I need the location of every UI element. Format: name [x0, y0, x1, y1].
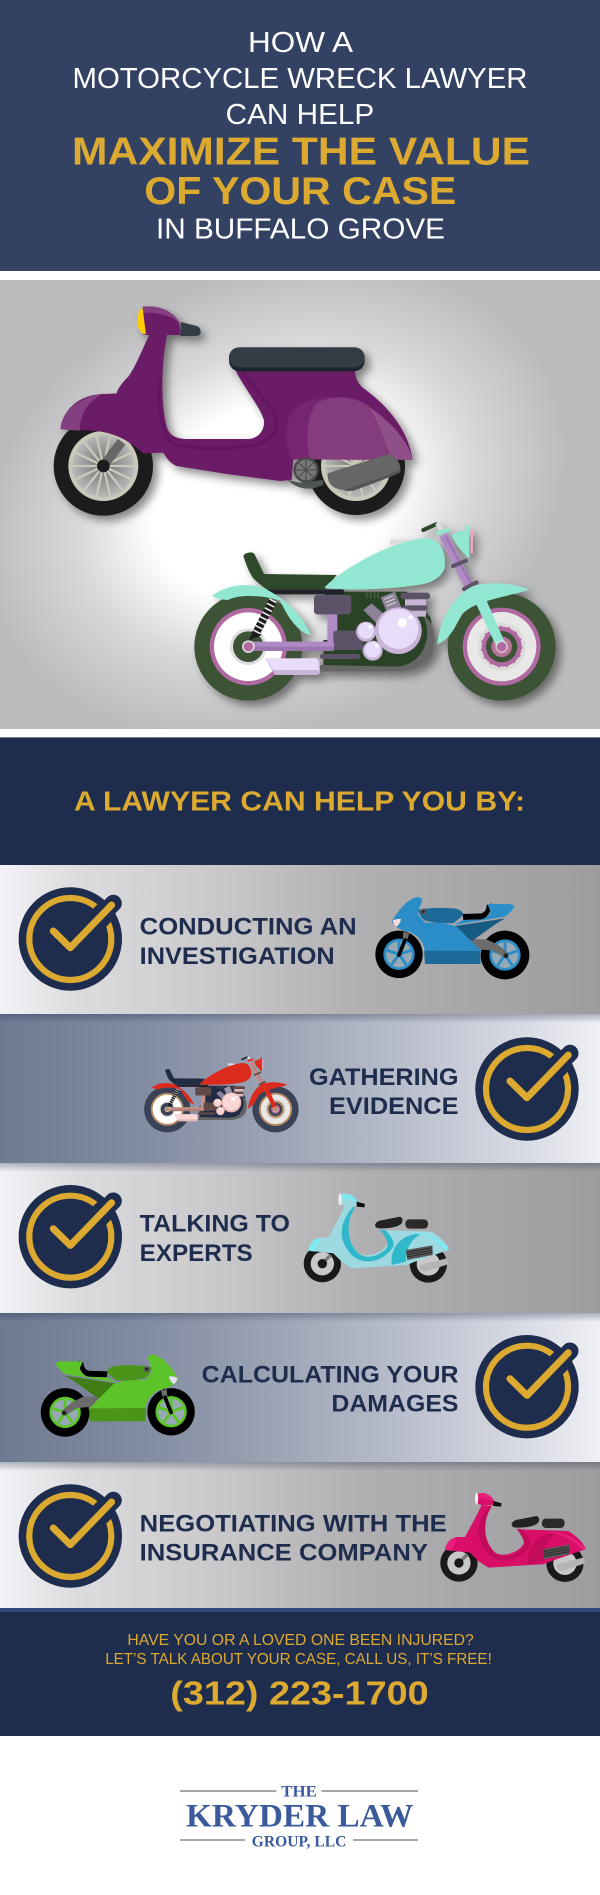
- logo: The Kryder Law Group, LLC: THE: [281, 1784, 317, 1801]
- scooter front wheel: [54, 416, 153, 516]
- scooter rear wheel: [307, 417, 405, 515]
- scooter body: [62, 333, 413, 481]
- row 3 text: [140, 1211, 290, 1267]
- row 5: negotiating with the insurance company: [0, 1462, 600, 1608]
- icon: checkmark: [19, 1484, 122, 1588]
- icon: red cruiser motorcycle: [144, 1057, 299, 1132]
- icon: green sport bike: [41, 1355, 195, 1437]
- row 1: conducting an investigation: [0, 865, 600, 1014]
- icon: checkmark: [19, 887, 122, 991]
- row 4 text: DAMAGES: [331, 1391, 458, 1418]
- row 1 text: [140, 914, 357, 970]
- title: intro lines: CAN HELP: [226, 99, 374, 131]
- call to action text: [105, 1632, 492, 1668]
- call to action text: HAVE YOU OR A LOVED ONE BEEN INJURED?: [127, 1632, 474, 1649]
- purple scooter illustration: [54, 306, 413, 516]
- row 2 text: [309, 1064, 458, 1120]
- header panel: [0, 0, 600, 271]
- row 4: calculating your damages: [0, 1313, 600, 1462]
- logo: The Kryder Law Group, LLC: [180, 1784, 418, 1851]
- row 5 text: INSURANCE COMPANY: [140, 1540, 428, 1567]
- title: intro lines: [72, 27, 528, 131]
- row 2 text: EVIDENCE: [329, 1093, 458, 1120]
- scooter side panel: [286, 397, 413, 460]
- phone number: (312) 223-1700: [170, 1676, 429, 1712]
- hero image panel: [0, 280, 600, 729]
- row 3 text: EXPERTS: [140, 1240, 253, 1267]
- title: gold highlight: [72, 130, 530, 213]
- row 3: talking to experts: [0, 1163, 600, 1313]
- row 5 text: NEGOTIATING WITH THE: [140, 1511, 447, 1538]
- mint cruiser motorcycle illustration: [194, 523, 556, 701]
- logo: The Kryder Law Group, LLC: GROUP, LLC: [252, 1834, 346, 1851]
- icon: checkmark: [475, 1037, 579, 1141]
- title: intro lines: HOW A: [248, 27, 353, 59]
- scooter headlamp: [137, 306, 201, 336]
- scooter seat: [229, 347, 365, 371]
- icon: blue sport bike: [375, 897, 529, 979]
- call to action text: LET’S TALK ABOUT YOUR CASE, CALL US, IT’S FREE!: [105, 1651, 492, 1668]
- title: location: IN BUFFALO GROVE: [156, 213, 445, 245]
- title: gold highlight: OF YOUR CASE: [144, 170, 456, 213]
- icon: pink scooter: [440, 1493, 586, 1582]
- row 1 text: CONDUCTING AN: [140, 914, 357, 941]
- icon: teal scooter: [304, 1193, 449, 1283]
- title: gold highlight: MAXIMIZE THE VALUE: [72, 130, 530, 173]
- title: intro lines: MOTORCYCLE WRECK LAWYER: [72, 63, 528, 95]
- row 2: gathering evidence: [0, 1014, 600, 1163]
- section heading band: [0, 737, 600, 865]
- icon: checkmark: [475, 1335, 579, 1438]
- row 5 text: [140, 1511, 447, 1567]
- row 4 text: [202, 1362, 458, 1418]
- heading: A LAWYER CAN HELP YOU BY:: [74, 786, 525, 817]
- row 3 text: TALKING TO: [140, 1211, 290, 1238]
- row 2 text: GATHERING: [309, 1064, 458, 1091]
- logo: The Kryder Law Group, LLC: KRYDER LAW: [186, 1799, 413, 1835]
- icon: checkmark: [19, 1185, 122, 1288]
- call to action footer band: [0, 1608, 600, 1736]
- row 1 text: INVESTIGATION: [140, 943, 335, 970]
- row 4 text: CALCULATING YOUR: [202, 1362, 458, 1389]
- scooter engine and exhaust: [287, 454, 401, 491]
